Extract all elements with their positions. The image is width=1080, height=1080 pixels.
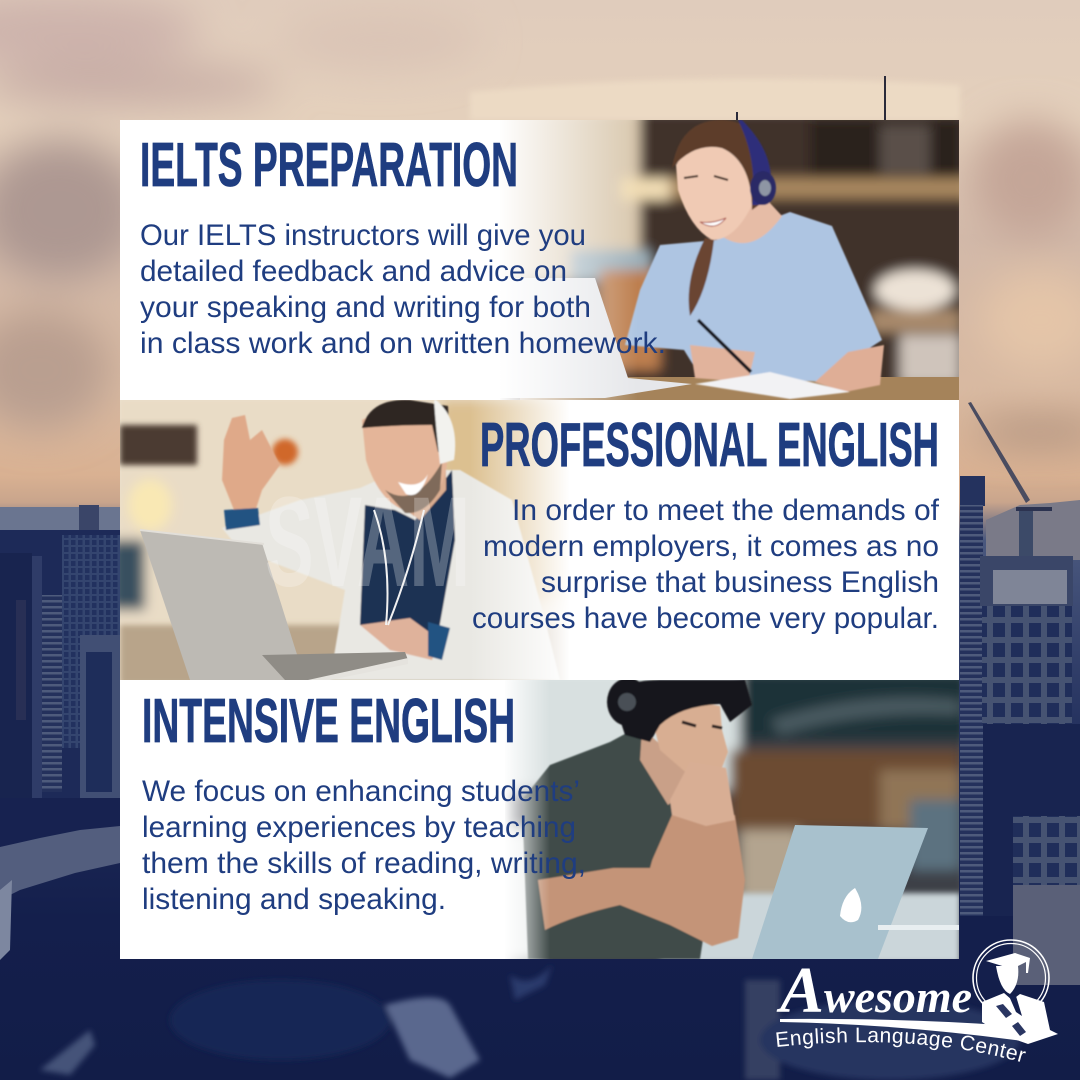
panel: IELTS preparation: [120, 110, 970, 410]
body text: modern employers, it comes as no: [483, 530, 939, 563]
body text: We focus on enhancing students’: [142, 775, 580, 808]
photo: man with headphones thinking at laptop: [506, 680, 959, 959]
right city buildings: [960, 402, 1080, 985]
logo wordmark: Awesome: [776, 954, 972, 1027]
photo: man waving at laptop: [120, 400, 563, 680]
body text: Our IELTS instructors will give you: [140, 219, 586, 252]
body text: your speaking and writing for both: [140, 291, 591, 324]
body text: [472, 494, 940, 635]
body text: courses have become very popular.: [472, 602, 939, 635]
heading: IELTS PREPARATION: [140, 131, 518, 200]
body text: in class work and on written homework.: [140, 327, 666, 360]
heading: INTENSIVE ENGLISH: [142, 687, 515, 756]
body text: listening and speaking.: [142, 883, 446, 916]
body text: learning experiences by teaching: [142, 811, 576, 844]
body text: In order to meet the demands of: [512, 494, 940, 527]
watermark: SVAM: [265, 471, 470, 614]
logo swoosh: [780, 1019, 1030, 1042]
logo tagline: English Language Center: [776, 1027, 1026, 1062]
fade to white: [120, 120, 638, 400]
park and ground: [40, 965, 1020, 1080]
fade to white: [120, 680, 550, 959]
logo: Awesome English Language Center: [776, 939, 1058, 1062]
fade to white: [470, 400, 959, 680]
body text: surprise that business English: [541, 566, 939, 599]
body text: [140, 219, 666, 360]
body text: detailed feedback and advice on: [140, 255, 567, 288]
body text: [142, 775, 586, 916]
panel: Professional English: [110, 390, 959, 690]
left city buildings: [0, 505, 120, 960]
photo: woman with headphones at laptop: [504, 120, 959, 400]
panel: Intensive English: [120, 670, 970, 970]
logo icon: graduate in ring: [973, 940, 1058, 1044]
body text: them the skills of reading, writing,: [142, 847, 586, 880]
